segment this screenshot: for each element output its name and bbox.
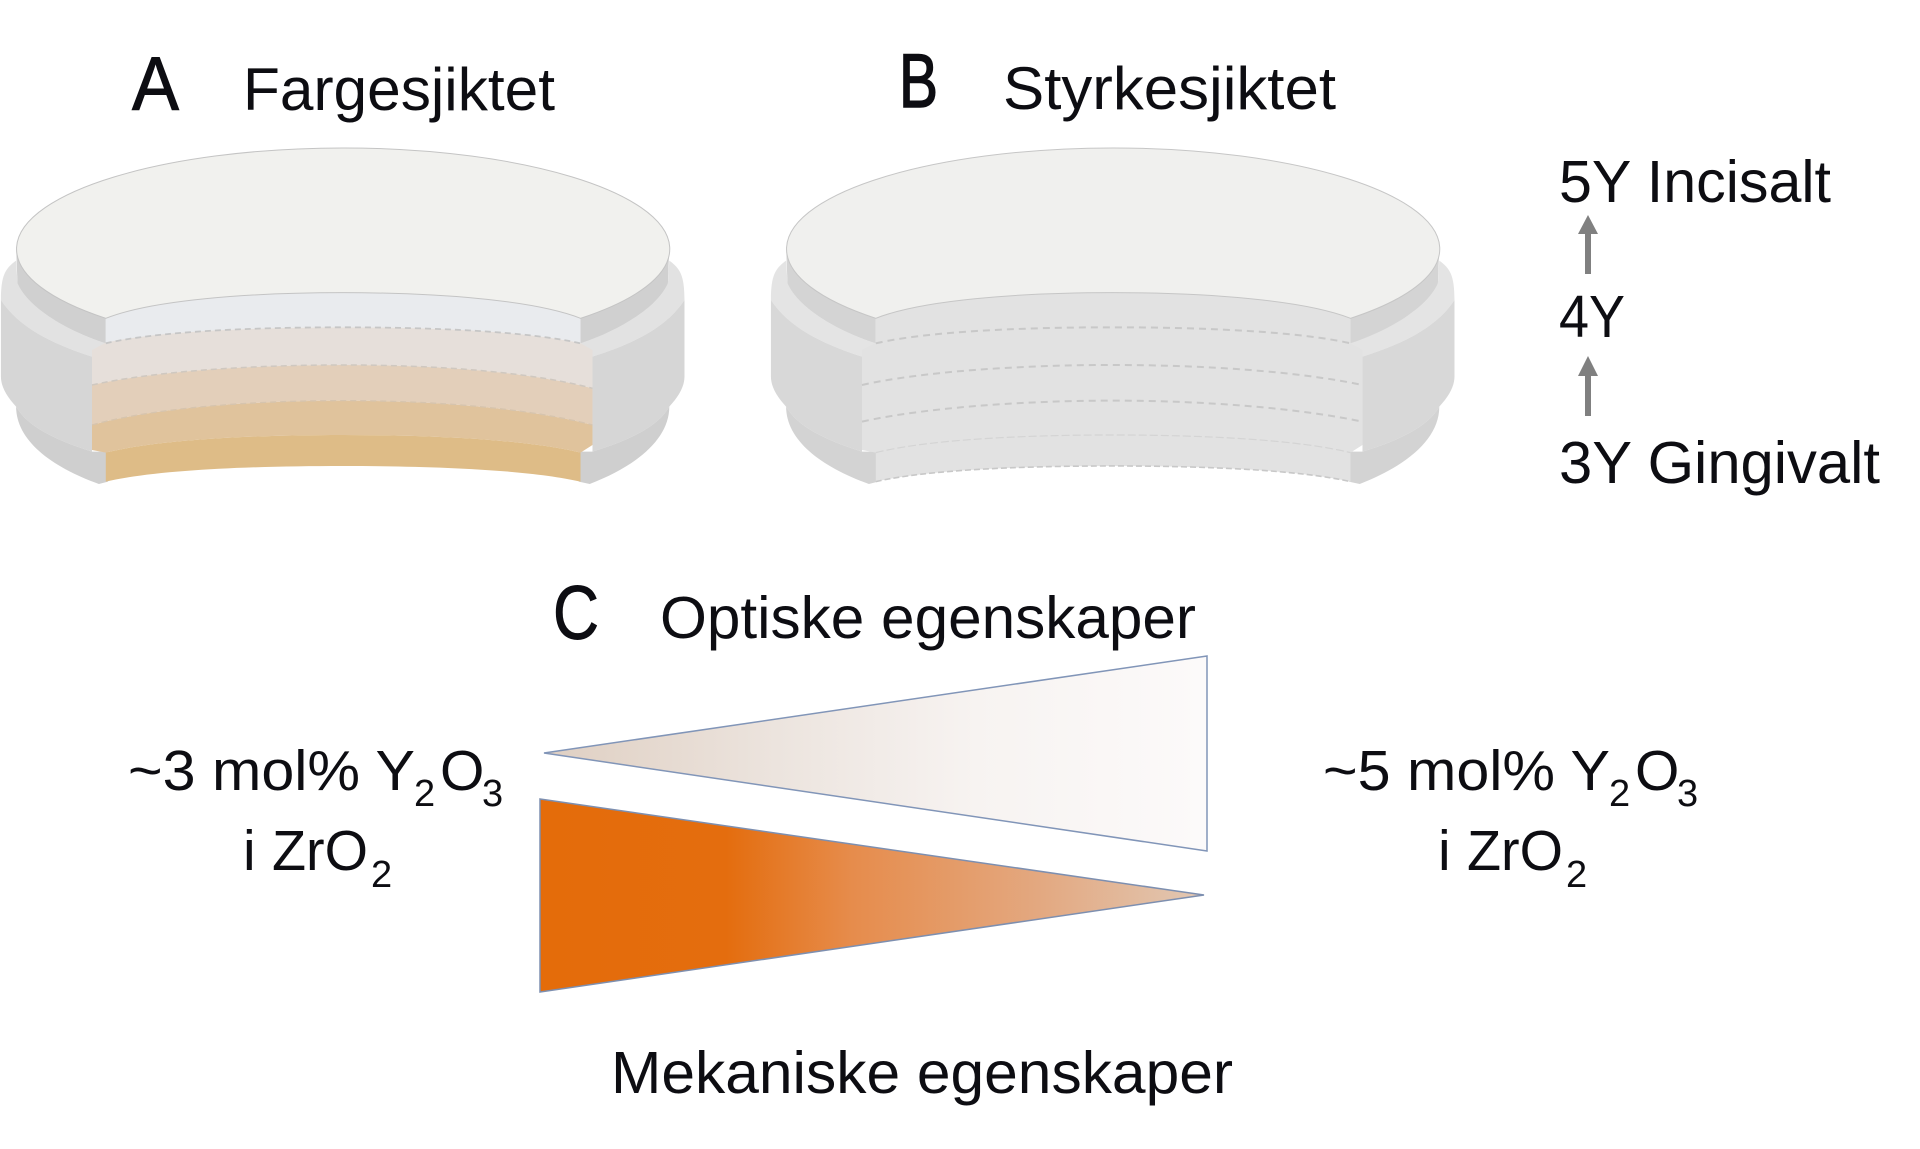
- wedge: optical properties: [544, 656, 1207, 851]
- top face: [17, 148, 670, 318]
- label: ~3 mol% Y2O3 i ZrO2: 3: [482, 773, 503, 815]
- panel A: colour layer disc: [1, 148, 684, 484]
- top face: [787, 148, 1440, 318]
- layer 5: [106, 435, 581, 482]
- label: ~5 mol% Y2O3 i ZrO2: [1323, 739, 1698, 896]
- label: ~3 mol% Y2O3 i ZrO2: ~3 mol% Y: [128, 739, 415, 803]
- label: 3Y Gingivalt: 3Y Gingivalt: [1559, 430, 1880, 496]
- heading: Fargesjiktet: Fargesjiktet: [243, 56, 555, 123]
- heading: Styrkesjiktet: Styrkesjiktet: [1003, 55, 1336, 122]
- label: ~3 mol% Y2O3 i ZrO2: [128, 739, 503, 896]
- label: ~3 mol% Y2O3 i ZrO2: ZrO: [272, 819, 368, 883]
- heading: A: A: [132, 42, 179, 127]
- label: ~5 mol% Y2O3 i ZrO2: ~5 mol% Y: [1323, 739, 1610, 803]
- layer 3: [92, 365, 592, 425]
- label: ~5 mol% Y2O3 i ZrO2: ZrO: [1467, 819, 1563, 883]
- arrow: 3Y to 4Y: [1578, 356, 1598, 416]
- layer 4: [92, 401, 592, 453]
- heading: Optiske egenskaper: Optiske egenskaper: [660, 585, 1196, 651]
- heading: B: B: [899, 39, 938, 124]
- label: ~3 mol% Y2O3 i ZrO2: O: [440, 739, 484, 803]
- layer 2: [92, 327, 592, 388]
- label: ~3 mol% Y2O3 i ZrO2: 2: [371, 854, 392, 896]
- heading: C: C: [553, 571, 599, 656]
- label: ~5 mol% Y2O3 i ZrO2: 3: [1677, 773, 1698, 815]
- label: ~5 mol% Y2O3 i ZrO2: i: [1438, 819, 1466, 883]
- layer 1: pale top: [106, 293, 581, 343]
- label: ~5 mol% Y2O3 i ZrO2: 2: [1609, 773, 1630, 815]
- label: ~3 mol% Y2O3 i ZrO2: i: [243, 819, 272, 883]
- grey layers: [862, 293, 1362, 482]
- panel B: strength layer disc: [771, 148, 1454, 484]
- label: ~3 mol% Y2O3 i ZrO2: 2: [414, 773, 435, 815]
- label: ~5 mol% Y2O3 i ZrO2: 2: [1566, 854, 1587, 896]
- heading: Mekaniske egenskaper: Mekaniske egenskaper: [611, 1040, 1233, 1106]
- label: 5Y Incisalt: 5Y Incisalt: [1559, 149, 1831, 215]
- label: ~5 mol% Y2O3 i ZrO2: O: [1635, 739, 1679, 803]
- wedge: mechanical properties: [540, 799, 1204, 992]
- label: 4Y: 4Y: [1559, 284, 1625, 350]
- arrow: 4Y to 5Y: [1578, 215, 1598, 274]
